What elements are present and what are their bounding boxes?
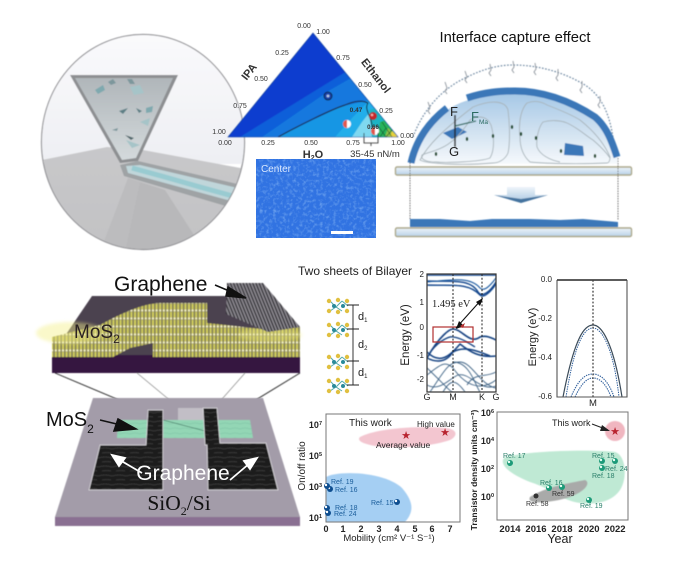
Graphene left electrode (89, 410, 163, 490)
chart: transistor density vs year: Transistor density units cm⁻³) (469, 409, 479, 530)
chart: on/off ratio vs mobility: 5 (412, 524, 418, 534)
label: MoS2 top: MoS (74, 322, 113, 343)
chart: on/off ratio vs mobility: 7 (319, 421, 322, 427)
chart: on/off ratio vs mobility: Ref. 19 (331, 479, 354, 486)
chart: transistor density vs year: Ref. 58 (526, 501, 549, 508)
chart: transistor density vs year: 4 (491, 437, 495, 443)
panel: SiO2/Si device (55, 398, 300, 526)
label: MoS2 lower: MoS (46, 409, 87, 431)
chart: on/off ratio vs mobility: 10 (309, 420, 319, 430)
chart: transistor density vs year: 2022 (604, 524, 626, 535)
force labels: F (450, 104, 458, 119)
chart: on/off ratio vs mobility: 5 (319, 452, 322, 458)
surfactant marks (428, 61, 600, 114)
arrows: graphene white (112, 455, 257, 480)
ternary labels: 0.50 (254, 76, 268, 83)
chart: on/off ratio vs mobility: On/off ratio (297, 441, 308, 491)
chart: band structure: M (449, 392, 457, 402)
chart: band structure (400, 270, 500, 402)
chart: band zoom at M: -0.6 (538, 392, 553, 401)
down arrow (494, 187, 548, 203)
chart: on/off ratio vs mobility: 6 (429, 524, 435, 534)
ternary labels: IPA (240, 62, 260, 83)
chart: on/off ratio vs mobility: 3 (319, 483, 322, 489)
panel: droplet with interface capture (396, 61, 632, 236)
force labels: G (449, 144, 459, 159)
chart: transistor density vs year (469, 408, 628, 546)
ternary labels: 0.50 (358, 82, 372, 89)
chart: transistor density vs year: ★ (610, 426, 620, 438)
chart: transistor density vs year: 10 (481, 464, 491, 474)
chart: band zoom at M (527, 275, 627, 409)
chart: on/off ratio vs mobility: Average value (376, 440, 430, 450)
chart: transistor density vs year: Ref. 15 (592, 453, 615, 460)
label: Graphene top: Graphene (114, 273, 207, 296)
diagram: bilayer crystal structure: d (358, 367, 364, 379)
chart: transistor density vs year: 2014 (499, 524, 521, 535)
ternary labels: 35-45 nN/m (350, 149, 400, 160)
ternary labels: Ethanol (358, 57, 393, 96)
chart: band structure: G (492, 392, 500, 402)
chart: transistor density vs year: 10 (481, 408, 491, 418)
ternary labels: 0.75 (336, 55, 350, 62)
chart: band structure: -2 (417, 375, 425, 384)
ternary labels: 0.25 (379, 108, 393, 115)
arrow: Graphene top (215, 285, 246, 298)
chart: on/off ratio vs mobility: 0 (323, 524, 329, 534)
force labels (449, 104, 488, 159)
label: MoS2 lower: 2 (87, 422, 94, 436)
force labels: Ma (479, 119, 488, 126)
ternary labels: O (315, 149, 324, 161)
chart: band structure: 2 (420, 270, 425, 279)
flakes at interface (411, 91, 617, 163)
lower plate (396, 228, 632, 236)
chart: transistor density vs year: 10 (481, 436, 491, 446)
heading: two sheets of bilayer: Two sheets of Bilayer (298, 264, 412, 278)
chart: on/off ratio vs mobility (297, 414, 460, 544)
panel: center microscope image (256, 159, 376, 238)
chart: on/off ratio vs mobility: Ref. 24 (334, 511, 357, 518)
label: SiO2/Si: /Si (187, 491, 211, 515)
chart: band structure: 1.495 eV (432, 299, 471, 310)
ternary labels: 1.00 (316, 29, 330, 36)
funnel (70, 75, 178, 163)
deposited flakes (410, 219, 618, 227)
MoS2 channel (117, 420, 253, 438)
MoS2 layer (52, 303, 300, 357)
chart: band structure: Energy (eV) (400, 304, 412, 366)
dashed outer arc (413, 65, 613, 137)
panel: MoS2 graphene device zoomed top view (36, 283, 302, 423)
chart: on/off ratio vs mobility: 7 (447, 524, 453, 534)
chart: on/off ratio vs mobility: 1 (319, 514, 322, 520)
chart: on/off ratio vs mobility: 10 (309, 513, 319, 523)
ternary labels: 1.00 (391, 140, 405, 147)
chart: on/off ratio vs mobility: Ref. 18 (335, 505, 358, 512)
Graphene right electrode (203, 408, 278, 490)
chart: on/off ratio vs mobility: 3 (376, 524, 382, 534)
ternary labels: 0.75 (346, 140, 360, 147)
chart: band zoom at M: -0.2 (538, 314, 553, 323)
ternary labels: 0.47 (350, 107, 363, 114)
arrow: MoS2 (100, 419, 136, 431)
channel (120, 160, 236, 206)
tracer particles (435, 125, 596, 158)
chart: on/off ratio vs mobility: 2 (358, 524, 364, 534)
chart: band structure: 1 (420, 298, 425, 307)
graphene ribbons at top right (226, 283, 300, 332)
chart: on/off ratio vs mobility: ★ (440, 427, 450, 439)
upper plate (396, 167, 632, 175)
ternary labels: 0.00 (297, 23, 311, 30)
chart: transistor density vs year: Ref. 19 (580, 503, 603, 510)
diagram: bilayer crystal structure (327, 298, 368, 394)
chart: on/off ratio vs mobility: 1 (340, 524, 346, 534)
chart: transistor density vs year: Ref. 24 (605, 466, 628, 473)
chart: ternary contour diagram (225, 30, 410, 146)
chart: transistor density vs year: 2016 (525, 524, 547, 535)
label: SiO2/Si: 2 (181, 504, 187, 518)
bracket (364, 133, 378, 146)
force arrows (454, 115, 456, 147)
chart: transistor density vs year: 0 (491, 493, 494, 499)
chart: band structure: G (423, 392, 431, 402)
chart: transistor density vs year: 2018 (551, 524, 573, 535)
flow streamlines (420, 102, 610, 164)
chart: on/off ratio vs mobility: 10 (309, 451, 319, 461)
chart: transistor density vs year: Year (547, 532, 573, 546)
chart: on/off ratio vs mobility: This work (349, 418, 393, 429)
ternary markers (324, 92, 379, 135)
chart: band zoom at M: Energy (eV) (527, 308, 539, 366)
ternary labels: 0.25 (261, 140, 275, 147)
diagram: bilayer crystal structure: 2 (364, 346, 368, 352)
ternary labels: 0.66 (367, 125, 379, 131)
label: SiO2/Si: SiO (147, 491, 181, 515)
label: MoS2 top: 2 (113, 332, 120, 346)
diagram: bilayer crystal structure: d (358, 311, 364, 323)
chart: band zoom at M: -0.4 (538, 353, 553, 362)
chart: transistor density vs year: Ref. 17 (503, 453, 526, 460)
chart: band zoom at M: M (589, 398, 597, 409)
ternary labels: 0.00 (218, 140, 232, 147)
chart: band structure: -1 (417, 351, 425, 360)
chart: transistor density vs year: Ref. 59 (552, 491, 575, 498)
chart: on/off ratio vs mobility: 4 (394, 524, 400, 534)
ternary labels (212, 23, 414, 162)
panel: funnel microchannel in a circular view (40, 34, 246, 252)
diagram: bilayer crystal structure: 1 (364, 374, 368, 380)
ternary labels: 0.00 (400, 133, 414, 140)
chart: transistor density vs year: This work (552, 418, 591, 428)
force labels: F (471, 109, 479, 124)
chart: on/off ratio vs mobility: Mobility (cm² V⁻¹ S⁻¹) (343, 533, 435, 544)
chart: band structure: 0 (420, 323, 425, 332)
chart: transistor density vs year: 6 (491, 409, 494, 415)
chart: transistor density vs year: 2020 (578, 524, 600, 535)
ternary labels: 0.75 (233, 103, 247, 110)
panel: center microscope image: Center (261, 164, 292, 175)
chart: on/off ratio vs mobility: 10 (309, 482, 319, 492)
ternary labels: 1.00 (212, 129, 226, 136)
ternary labels: H (303, 149, 311, 161)
chart: transistor density vs year: 2 (491, 465, 494, 471)
diagram: bilayer crystal structure: 1 (364, 318, 368, 324)
chart: on/off ratio vs mobility: High value (417, 420, 455, 429)
ternary labels: 0.50 (304, 140, 318, 147)
chart: transistor density vs year: Ref. 16 (540, 480, 563, 487)
heading: interface capture effect: Interface capture effect (439, 30, 591, 46)
chart: band zoom at M: 0.0 (541, 275, 553, 284)
chart: band structure: K (479, 392, 485, 402)
label: Graphene white: Graphene (136, 462, 230, 485)
ternary labels: 2 (311, 155, 315, 162)
guide lines (410, 158, 618, 220)
chart: on/off ratio vs mobility: Ref. 15 (371, 500, 394, 507)
chart: on/off ratio vs mobility: Ref. 16 (335, 487, 358, 494)
ternary labels: 0.25 (275, 50, 289, 57)
chart: transistor density vs year: 10 (481, 492, 491, 502)
diagram: bilayer crystal structure: d (358, 339, 364, 351)
chart: on/off ratio vs mobility: ★ (401, 430, 411, 442)
chart: transistor density vs year: Ref. 18 (592, 473, 615, 480)
